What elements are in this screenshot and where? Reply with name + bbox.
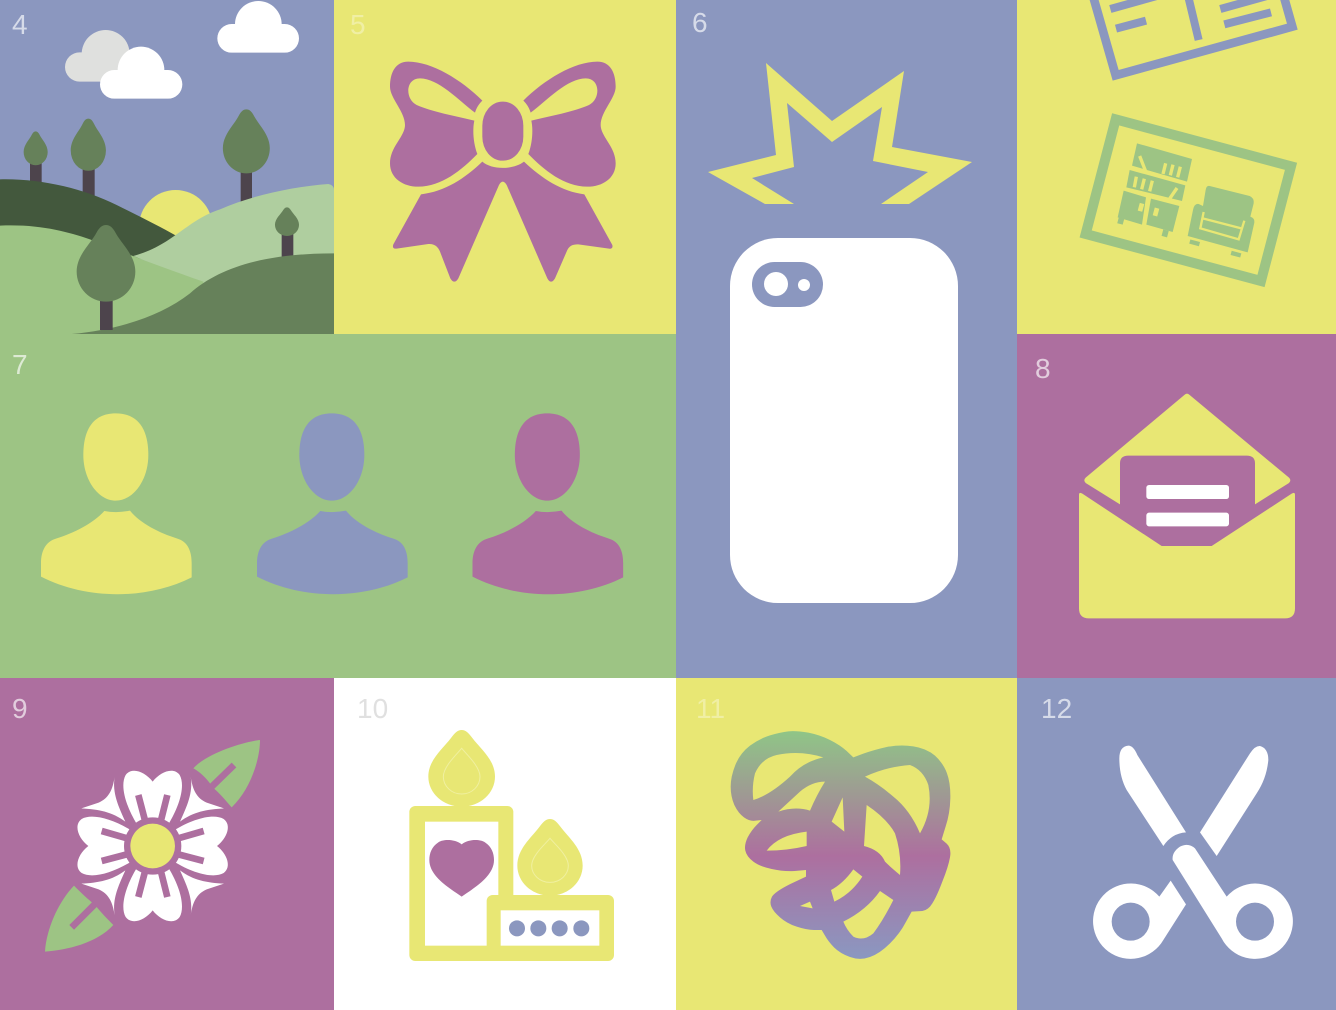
trees behind hills — [24, 109, 270, 205]
number 6: 6 — [692, 7, 708, 38]
dots — [509, 920, 589, 936]
icon: bow — [390, 62, 616, 282]
icon: blue person — [257, 413, 408, 594]
panel 7: people — [0, 334, 676, 678]
white cloud middle — [100, 47, 182, 99]
icon: furniture picture — [1086, 119, 1291, 281]
small right tree — [275, 207, 299, 258]
number 10: 10 — [357, 693, 388, 724]
icon: purple person — [472, 413, 623, 594]
number 12: 12 — [1041, 693, 1072, 724]
icon: landscape scene — [0, 1, 334, 334]
panel 9: flower — [0, 678, 334, 1010]
number 11: 11 — [696, 693, 725, 724]
icon: candles — [409, 730, 614, 961]
olive hill — [72, 253, 334, 334]
panel 6: phone — [676, 0, 1017, 678]
panel 4: landscape — [0, 0, 334, 334]
icon: open envelope — [1079, 394, 1295, 618]
panel 8: envelope — [1017, 334, 1336, 678]
light hill — [133, 184, 334, 334]
white cloud right — [217, 1, 299, 53]
number 9: 9 — [12, 693, 28, 724]
green hill — [0, 225, 203, 334]
heart — [429, 840, 494, 897]
panel 11: scribble — [676, 678, 1017, 1010]
icon: yellow person — [41, 413, 192, 594]
panel 12: scissors — [1017, 678, 1336, 1010]
icon: flower with leaves — [45, 740, 260, 952]
number 4: 4 — [12, 9, 28, 40]
sun — [139, 190, 212, 263]
number 8: 8 — [1035, 353, 1051, 384]
bookshelf — [1117, 143, 1192, 237]
icon: phone — [730, 238, 958, 603]
number 5: 5 — [350, 9, 366, 40]
panel 5: bow — [334, 0, 676, 334]
armchair — [1188, 186, 1254, 258]
dark hill — [0, 179, 177, 263]
gray cloud — [65, 30, 130, 82]
panel: book and furniture — [1017, 0, 1336, 334]
foreground tree — [77, 225, 135, 330]
number 7: 7 — [12, 349, 28, 380]
panel 10: candles — [334, 678, 676, 1010]
icon: open book frame — [1094, 0, 1292, 75]
icon: tangled scribble — [731, 731, 950, 959]
icon: scissors — [1093, 746, 1293, 959]
icon: starburst — [708, 63, 972, 204]
